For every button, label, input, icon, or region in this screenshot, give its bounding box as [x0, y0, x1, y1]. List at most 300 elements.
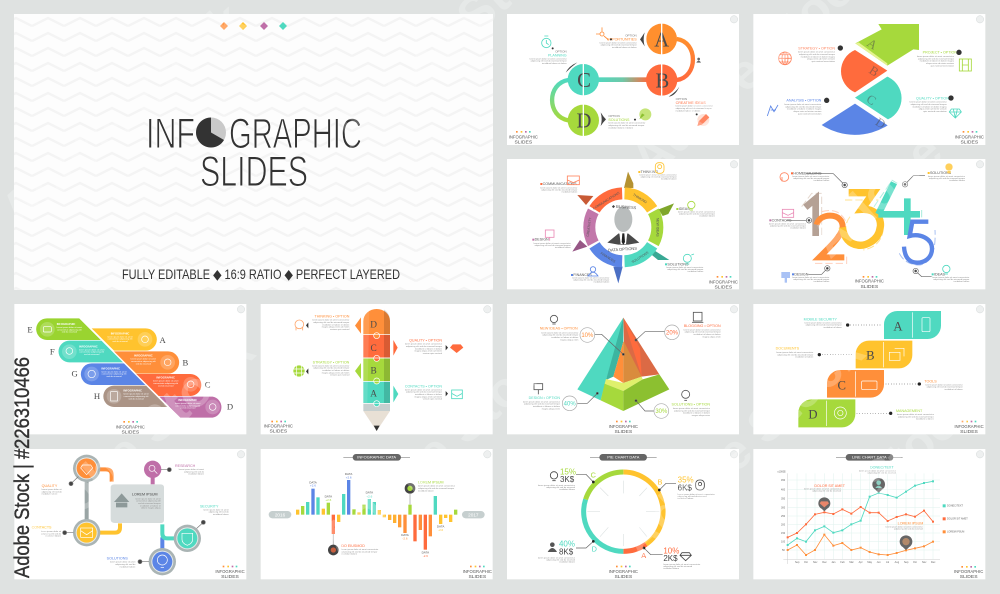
logo: [264, 421, 293, 435]
pill letters: F: [50, 347, 55, 357]
chart title: [343, 454, 410, 461]
text: design: adipiscing elit sed do eiusmod tempor: [535, 244, 571, 247]
circle D: [568, 104, 599, 137]
value C: adipiscing elit sed do eiusmod: [546, 486, 576, 489]
text: quality: quis nostrud exercitation: [923, 110, 947, 113]
icon: film frame: [959, 59, 971, 71]
callout: ideas: [913, 268, 932, 277]
text: solutions: lorem ipsum dolor sit amet consectetur: [673, 407, 710, 410]
value C: 3K$: [560, 475, 575, 484]
text: design: lorem ipsum dolor sit amet consectetur: [792, 276, 830, 279]
logo: INFOGRAPHIC: [215, 569, 245, 575]
logo: SLIDES: [221, 574, 240, 580]
callout 10%: 10%: [581, 333, 594, 339]
year 2017: [462, 511, 485, 518]
text: solutions: lorem ipsum dolor sit amet consectetur: [608, 122, 646, 125]
axis labels: Dec: [931, 561, 936, 564]
text: dolor sit amet: [804, 484, 846, 493]
text: contacts: veniam quis nostrud: [423, 398, 443, 401]
text: research: incididunt labore: [188, 473, 205, 476]
stock watermarks: Stock: [850, 375, 989, 508]
text: contacts: adipiscing elit sed do eiusmod tempor: [406, 391, 442, 394]
text: quality: veniam quis nostrud: [423, 352, 443, 355]
node: contacts envelope: [73, 519, 100, 546]
pin: dolor sit amet: [818, 497, 830, 511]
text: blogging: [684, 324, 721, 338]
text: solutions: adipiscing elit sed do eiusmod tempor: [608, 124, 645, 127]
text: design: magna aliqua enim: [542, 408, 560, 410]
text: ideas: adipiscing elit sed do eiusmod tempor: [933, 278, 970, 281]
pencil letters: D: [370, 321, 377, 331]
leader 40%: [577, 392, 598, 403]
icon: stopwatch: [542, 36, 554, 49]
text: solutions: SOLUTIONS: [107, 557, 128, 561]
text: security: [200, 504, 229, 516]
bars: [296, 480, 457, 550]
callout 20%: [665, 325, 679, 340]
pin: lorem ipsum: [900, 535, 912, 550]
text: strategy: quis nostrud exercitation: [812, 60, 836, 63]
text: design: DESIGN: [794, 272, 809, 276]
text: lorem ipsum: lorem ipsum dolor sit amet consectetur: [886, 526, 923, 529]
logo: [609, 566, 638, 580]
text: security: incididunt labore: [213, 513, 229, 516]
callout: lorem ipsum: [405, 481, 455, 505]
pill F: consectetur adipiscing elit: [79, 351, 104, 354]
text: finances: [571, 273, 610, 284]
text: management: MANAGEMENT: [896, 409, 923, 413]
text: new ideas: adipiscing elit sed do eiusmod tempor: [542, 334, 579, 337]
leader 20%: [635, 332, 665, 341]
text: contacts: [405, 384, 443, 401]
text: solutions: adipiscing elit sed do: [115, 563, 136, 566]
centre captions: [608, 203, 637, 253]
text: opportunities: OPTION: [625, 34, 637, 38]
value D: lorem ipsum dolor sit amet consectetur: [538, 556, 575, 559]
icon: sign: [781, 272, 790, 283]
callout 20%: 20%: [666, 330, 679, 336]
axis labels: Jun: [877, 561, 881, 564]
bar value labels: -2.6: [438, 528, 444, 532]
number 4: [878, 183, 920, 235]
pill B: sed do eiusmod: [136, 363, 152, 365]
step C: [827, 370, 884, 398]
text: documents: incididunt ut labore: [795, 356, 814, 359]
series: orange: [788, 535, 933, 555]
text: strategy: lorem ipsum dolor sit amet consectetur: [798, 51, 835, 54]
text: analysis: adipiscing elit sed do eiusmod tempor: [785, 105, 822, 108]
logo: SLIDES: [614, 574, 633, 580]
text: security: SECURITY: [200, 504, 219, 508]
panel: arrow wedges: [753, 14, 985, 145]
callout: homebuilding: [806, 174, 847, 188]
pill C: consectetur adipiscing elit: [153, 382, 178, 385]
donut ring: [584, 472, 663, 551]
text: documents: lorem ipsum dolor sit amet consectetur: [776, 351, 814, 354]
text: project: PROJECT • OPTION: [923, 51, 957, 55]
text: contacts: adipiscing elit sed do: [41, 532, 62, 535]
ring labels: SOLUTIONS: [631, 250, 650, 264]
panel: circles A B C D: [507, 14, 739, 145]
pill G: INFOGRAPHIC: [101, 366, 120, 370]
dotted leaders: [818, 323, 921, 415]
text: strategy: [312, 360, 350, 377]
text: ideas: lorem ipsum dolor sit amet consectetur: [932, 276, 970, 279]
text: quality: adipiscing elit sed do eiusmod tempor: [911, 103, 947, 106]
logo: SLIDES: [269, 429, 288, 435]
year 2016: [269, 511, 291, 518]
text: solutions: [665, 262, 704, 273]
text: contacts: CONTACTS • OPTION: [405, 384, 442, 388]
text: homebuilding: incididunt labore: [814, 179, 830, 182]
icon: envelope: [782, 209, 794, 217]
logo: [509, 131, 538, 145]
panel: cover slide: [14, 14, 493, 290]
text: communications: incididunt labore: [562, 190, 578, 193]
text: thinking: [312, 315, 350, 331]
value A: adipiscing elit sed do eiusmod: [663, 565, 693, 568]
text: solutions: [928, 171, 966, 182]
panel: leaf staircase: [753, 304, 985, 435]
text: research: RESEARCH: [175, 464, 196, 468]
text: planning: adipiscing elit sed do eiusmod tempor: [531, 60, 567, 63]
cover title: [146, 110, 362, 196]
text: design: incididunt ut labore et dolore: [533, 405, 561, 408]
icon: network: [767, 105, 778, 116]
text: ideas: incididunt labore: [954, 280, 970, 283]
text: project: lorem ipsum dolor sit amet consectetur: [917, 55, 954, 58]
text: mobile security: [804, 317, 842, 329]
text: contacts: lorem ipsum dolor sit amet consectetur: [405, 388, 442, 391]
centre card: [111, 484, 164, 523]
value B: 6K$: [678, 484, 692, 493]
bar value labels: DATA: [437, 524, 444, 528]
text: ideas: lorem ipsum dolor sit amet consectetur: [678, 211, 715, 214]
text: security: lorem ipsum dolor sit amet: [203, 508, 229, 511]
text: project: aliqua enim ad minim veniam: [926, 63, 954, 65]
pill H: [103, 386, 168, 407]
ring labels: COMMUNICATIONS: [592, 191, 621, 211]
text: strategy: lorem ipsum dolor sit amet consectetur: [312, 364, 350, 367]
logo: INFOGRAPHIC: [264, 424, 293, 430]
text: quality: lorem ipsum dolor sit: [42, 488, 62, 491]
text: ideas: incididunt labore: [699, 215, 716, 218]
text: management: lorem ipsum dolor sit amet consectetur: [897, 413, 934, 416]
icon: bulb 2: [683, 254, 694, 264]
text: contacts: [769, 218, 807, 230]
text: quality: [910, 96, 949, 113]
text: design: adipiscing elit sed do eiusmod tempor: [524, 403, 560, 406]
legend: DOLOR SIT AMET: [947, 518, 968, 521]
icon: head: [696, 480, 704, 490]
pill E: sed do eiusmod: [62, 332, 78, 334]
callout: do eiusmod: adipiscing elit sed do eiusmod tempor: [341, 550, 378, 553]
axis labels: Aug: [895, 561, 900, 564]
text: quality: incididunt ut labore et dolore: [415, 347, 443, 350]
pill F: lorem ipsum dolor sit amet: [79, 348, 105, 351]
text: contacts: incididunt labore: [45, 535, 62, 538]
logo: INFOGRAPHIC: [609, 424, 638, 430]
stock watermarks: Adobe Stock: [0, 322, 265, 568]
text: new ideas: incididunt ut labore et dolore: [551, 336, 579, 339]
text: research: adipiscing elit sed do: [184, 470, 205, 473]
axis labels: Dec: [822, 561, 828, 564]
text: dolor sit amet: adipiscing elit sed do eiusmod: [812, 490, 842, 493]
icon: globe: [779, 52, 791, 65]
text: analysis: [784, 99, 822, 115]
step A: A: [893, 319, 903, 333]
logo: INFOGRAPHIC: [463, 569, 492, 575]
stock id side text: Adobe Stock | #226310466: [11, 357, 34, 578]
text: communications: [540, 182, 578, 193]
callout: lorem ipsum: lorem ipsum dolor sit amet consectetur: [418, 485, 455, 488]
text: design: DESIGN: [535, 238, 549, 242]
legend: LOREM IPSUM: [947, 531, 964, 534]
bar value labels: DATA: [345, 472, 352, 476]
step D: [798, 399, 855, 427]
pill A: INFOGRAPHIC: [111, 331, 129, 335]
text: communications: adipiscing elit sed do eiusmod tempor: [541, 188, 578, 191]
icon: billboard: [545, 230, 554, 241]
text: documents: adipiscing elit sed do eiusmod tempor: [777, 353, 814, 356]
pill B: consectetur adipiscing elit: [131, 360, 156, 363]
logo: INFOGRAPHIC: [954, 569, 984, 575]
text: creative ideas: CREATIVE IDEAS: [676, 101, 706, 105]
text: tools: incididunt ut labore: [945, 388, 963, 391]
number 2: [817, 216, 844, 257]
icon: globe: [293, 365, 305, 377]
pill E: INFOGRAPHIC: [57, 322, 75, 326]
value C: lorem ipsum dolor sit amet consectetur: [538, 484, 575, 487]
panel: slanted pills: [14, 304, 246, 435]
centre card: sed do eiusmod tempor: [138, 502, 161, 505]
callout: solutions: [902, 176, 925, 187]
text: solutions: adipiscing elit sed do eiusmod tempor: [674, 409, 710, 412]
logo: SLIDES: [960, 429, 979, 435]
value A: [663, 546, 701, 570]
pill H: lorem ipsum dolor sit amet: [123, 393, 149, 396]
axis labels: 450: [781, 479, 786, 482]
text: finances: incididunt labore: [594, 281, 610, 284]
axis labels: 300: [781, 507, 786, 510]
pill F: sed do eiusmod: [84, 354, 100, 356]
text: solutions: SOLUTIONS • OPTION: [672, 403, 710, 407]
text: documents: DOCUMENTS: [776, 347, 800, 351]
logo: SLIDES: [614, 429, 633, 435]
text: finances: lorem ipsum dolor sit amet consectetur: [572, 277, 610, 280]
icon: bulb: [550, 315, 558, 324]
text: contacts: [32, 526, 62, 538]
bar value labels: [309, 472, 444, 558]
arrow tabs: [355, 317, 398, 402]
panel: business ring: [507, 159, 739, 290]
callout: do eiusmod: [328, 534, 379, 556]
panel: pyramid: [507, 304, 739, 435]
text: solutions: incididunt ut labore et dolore: [683, 412, 711, 415]
icon: head: [295, 320, 304, 330]
chart title: [590, 454, 657, 461]
icon: target: [634, 108, 651, 121]
text: lorem ipsum: LOREM IPSUM: [898, 522, 923, 526]
axis labels: 400: [781, 488, 786, 491]
text: strategy: STRATEGY • OPTION: [798, 46, 835, 50]
value D: 8K$: [559, 547, 574, 556]
pyramid: [577, 318, 669, 411]
stock watermarks: Adobe: [800, 122, 953, 268]
cover title: GRAPHIC: [229, 110, 362, 158]
bar value labels: -2.6: [423, 554, 428, 558]
text: tools: [924, 379, 963, 391]
circle B: [646, 63, 677, 97]
callout: lorem ipsum: incididunt labore: [418, 489, 435, 492]
text: design: [792, 272, 830, 283]
text: mobile security: MOBILE SECURITY: [804, 317, 838, 321]
icon: balloon: [682, 390, 690, 400]
text: solutions: SOLUTIONS: [608, 118, 630, 122]
chart title: LINE CHART DATA: [852, 455, 887, 460]
bar value labels: DATA: [422, 550, 429, 554]
pill F: [58, 341, 123, 362]
chart title: [836, 454, 903, 461]
text: tools: adipiscing elit sed do eiusmod tempor: [927, 386, 963, 389]
text: blogging: magna aliqua enim: [702, 336, 721, 338]
axis labels: Oct: [804, 561, 808, 564]
pill letters: H: [94, 391, 100, 401]
text: solutions: lorem ipsum dolor sit amet consectetur: [666, 266, 704, 269]
text: thinking: incididunt labore: [661, 178, 677, 181]
pill D: lorem ipsum dolor sit amet: [175, 402, 201, 405]
panel: infographic data bar chart: [261, 449, 493, 580]
text: quality: QUALITY • OPTION: [916, 96, 949, 100]
pencil: [363, 309, 390, 431]
pill A: lorem ipsum dolor sit amet: [107, 335, 133, 338]
logo: INFOGRAPHIC: [509, 134, 538, 140]
black gear bullets: [824, 45, 962, 103]
text: thinking: lorem ipsum dolor sit amet consectetur: [640, 174, 677, 177]
pill H: INFOGRAPHIC: [123, 389, 142, 393]
text: quality: magna aliqua enim ad minim: [414, 351, 442, 353]
text: strategy: incididunt ut labore et dolore: [322, 369, 350, 372]
arrow A: [855, 24, 919, 66]
text: contacts: lorem ipsum dolor sit: [41, 530, 61, 533]
slice letters: B: [658, 478, 663, 487]
ring segments: [589, 193, 657, 261]
text: quality: [42, 484, 62, 496]
centre card: consectetur adipiscing elit: [136, 500, 161, 503]
pin: donec: [872, 478, 885, 493]
axis labels: Jan: [831, 561, 836, 564]
logo: [116, 421, 145, 435]
text: strategy: veniam quis nostrud: [330, 374, 350, 377]
text: creative ideas: adipiscing elit sed do eiusmod tempor: [676, 107, 712, 110]
node: solutions balloon: [149, 548, 176, 575]
text: strategy: adipiscing elit sed do eiusmod tempor: [799, 53, 835, 56]
slice letters: A: [641, 551, 646, 560]
callout: do eiusmod: DO EIUSMOD: [341, 544, 365, 548]
pill F: INFOGRAPHIC: [79, 344, 98, 348]
text: analysis: aliqua enim ad minim veniam: [793, 111, 822, 113]
text: quality: adipiscing elit sed do: [42, 490, 62, 493]
value C: 15%: [560, 467, 576, 476]
logo: INFOGRAPHIC: [855, 279, 884, 285]
value C: [538, 467, 576, 491]
text: donec: lorem ipsum dolor sit amet consectetur: [859, 470, 896, 473]
text: tools: lorem ipsum dolor sit amet consectetur: [926, 383, 963, 386]
text: planning: lorem ipsum dolor sit amet consectetur: [530, 57, 567, 60]
centre card: incididunt ut labore et: [140, 504, 161, 507]
text: strategy: magna aliqua enim ad minim: [322, 372, 350, 374]
text: quality: incididunt ut labore et dolore magna: [912, 105, 947, 108]
cover subtitle: FULLY EDITABLE ◆ 16:9 RATIO ◆ PERFECT LAYERED: [122, 266, 400, 282]
text: dolor sit amet: lorem ipsum dolor sit amet consectetur: [804, 488, 841, 491]
person bust: [607, 207, 639, 245]
pill letters: [27, 324, 233, 412]
step C: C: [837, 378, 846, 392]
black carets: [306, 322, 448, 396]
logo: INFOGRAPHIC: [116, 424, 145, 430]
logo: INFOGRAPHIC: [955, 134, 984, 140]
text: management: [896, 409, 935, 421]
text: ideas: [932, 272, 970, 283]
icon: bulb 2: [943, 265, 950, 274]
logo: SLIDES: [714, 284, 733, 290]
logo: SLIDES: [960, 574, 978, 580]
text: thinking: adipiscing elit sed do eiusmod tempor: [641, 176, 677, 179]
icon: envelope: [452, 390, 462, 399]
icon: sign: [534, 384, 543, 394]
text: contacts: lorem ipsum dolor sit amet consectetur: [769, 223, 806, 226]
text: contacts: CONTACTS: [772, 218, 792, 222]
text: design: [532, 238, 571, 249]
pill G: [81, 363, 146, 385]
logo: [609, 421, 638, 435]
wedge C: [855, 77, 902, 119]
text: quality: aliqua enim ad minim veniam: [919, 109, 947, 111]
pill letters: E: [27, 324, 33, 334]
bar value labels: +2.6: [366, 494, 373, 498]
text: solutions: incididunt labore: [949, 179, 966, 182]
text: ideas: IDEAS: [679, 207, 690, 211]
slice letters: [591, 471, 663, 560]
text: solutions: [107, 557, 136, 568]
text: blogging: incididunt ut labore et dolore: [694, 333, 721, 336]
bar value labels: DATA: [309, 480, 317, 484]
chart title: INFOGRAPHIC DATA: [357, 455, 396, 460]
text: dolor sit amet: DOLOR SIT AMET: [814, 484, 846, 488]
bar value labels: +2.6: [346, 476, 352, 480]
logo: [463, 566, 492, 580]
text: tools: TOOLS: [924, 379, 937, 383]
wedge D: [822, 104, 888, 135]
callout 30%: 30%: [655, 409, 668, 415]
axis labels: Sep: [904, 561, 909, 564]
node: quality diamond: [73, 455, 100, 482]
centre captions: ◆ BUSINESS: [612, 203, 637, 210]
text: quality: lorem ipsum dolor sit amet consectetur: [910, 101, 947, 104]
text: design: adipiscing elit sed do eiusmod tempor: [793, 278, 830, 281]
centre card: LOREM IPSUM: [132, 493, 158, 497]
series: red: [788, 507, 933, 537]
text: ideas: adipiscing elit sed do eiusmod tempor: [679, 213, 715, 216]
text: new ideas: magna aliqua enim: [560, 339, 579, 341]
text: research: lorem ipsum dolor sit amet: [179, 468, 204, 471]
icon: bulb: [688, 201, 695, 210]
step B: B: [866, 349, 875, 363]
text: solutions: SOLUTIONS: [667, 262, 689, 266]
centre card: dolore magna aliqua: [141, 507, 161, 510]
text: blogging: BLOGGING • OPTION: [684, 324, 721, 328]
callout: do eiusmod: lorem ipsum dolor sit amet consectetur: [341, 548, 379, 551]
